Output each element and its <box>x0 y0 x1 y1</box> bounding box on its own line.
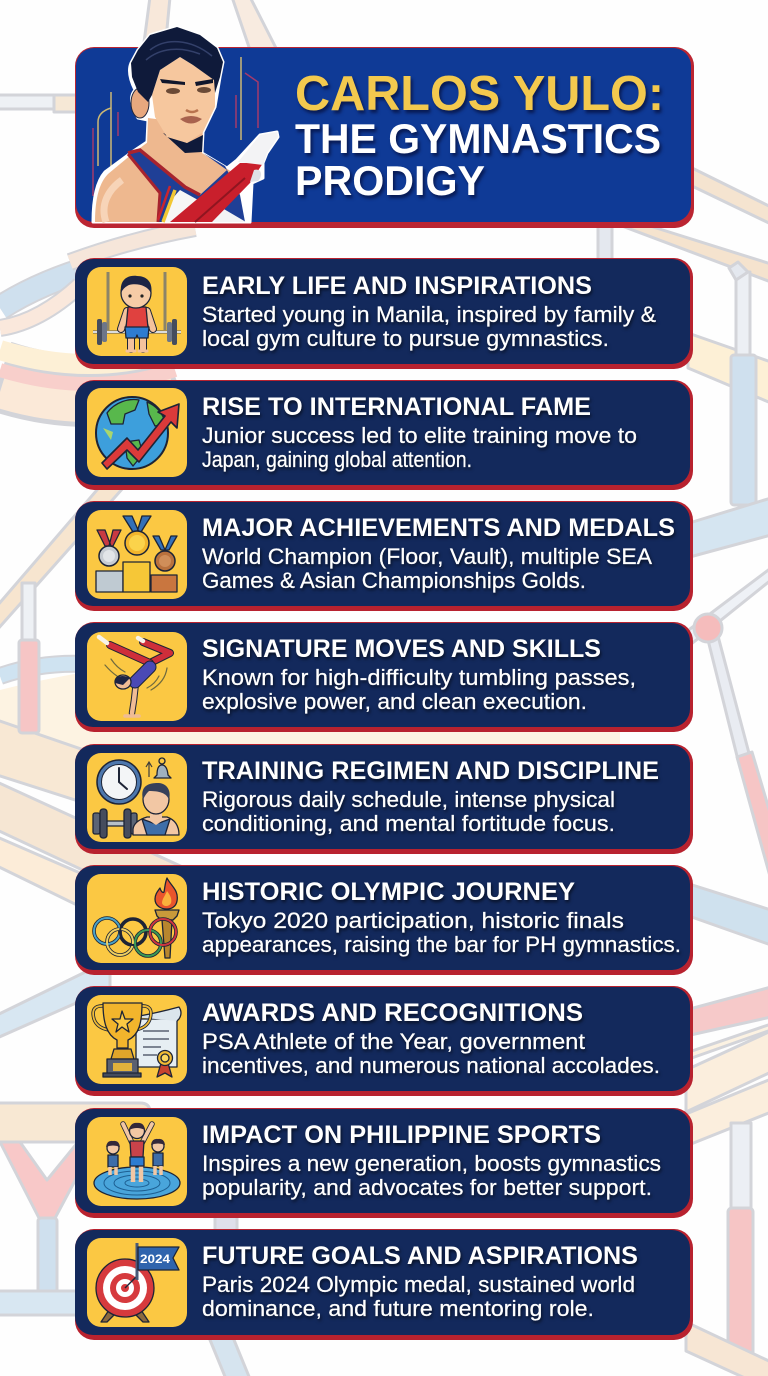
title text <box>295 67 664 204</box>
description: Paris 2024 Olympic medal, sustained world <box>202 1272 635 1297</box>
panel: awards and recognitions <box>75 986 693 1096</box>
description: explosive power, and clean execution. <box>202 689 587 714</box>
description: Started young in Manila, inspired by family & <box>202 302 656 327</box>
description <box>202 787 615 836</box>
description <box>202 1272 635 1321</box>
description: conditioning, and mental fortitude focus. <box>202 811 615 836</box>
description: Games & Asian Championships Golds. <box>202 568 586 593</box>
description: popularity, and advocates for better support. <box>202 1175 652 1200</box>
description: appearances, raising the bar for PH gymnastics. <box>202 932 681 957</box>
description: incentives, and numerous national accolades. <box>202 1053 660 1078</box>
heading: MAJOR ACHIEVEMENTS AND MEDALS <box>202 514 675 542</box>
heading: EARLY LIFE AND INSPIRATIONS <box>202 272 592 300</box>
heading: FUTURE GOALS AND ASPIRATIONS <box>202 1242 638 1270</box>
icon: trophy and certificate <box>87 995 187 1084</box>
panel: future goals and aspirations <box>75 1229 693 1340</box>
heading: RISE TO INTERNATIONAL FAME <box>202 393 591 421</box>
icon: medals on podium <box>87 510 187 599</box>
decorative circuit lines <box>93 57 258 196</box>
panel: signature moves and skills <box>75 622 693 732</box>
description <box>202 908 681 957</box>
heading: HISTORIC OLYMPIC JOURNEY <box>202 878 575 906</box>
description <box>202 302 656 351</box>
panel: historic olympic journey <box>75 865 693 975</box>
description: Japan, gaining global attention. <box>202 447 472 472</box>
icon: clock, dumbbell and athlete <box>87 753 187 842</box>
description: Known for high-difficulty tumbling passes, <box>202 665 636 690</box>
description: Inspires a new generation, boosts gymnastics <box>202 1151 661 1176</box>
icon: target with 2024 flag: 2024 <box>140 1252 170 1266</box>
panel: rise to international fame <box>75 380 693 490</box>
icon: gymnast handstand <box>87 632 187 721</box>
title text: PRODIGY <box>295 157 485 204</box>
title text: THE GYMNASTICS <box>295 115 661 162</box>
description: local gym culture to pursue gymnastics. <box>202 326 609 351</box>
description: World Champion (Floor, Vault), multiple SEA <box>202 544 652 569</box>
panel: title banner <box>75 27 694 228</box>
description: Tokyo 2020 participation, historic finals <box>202 908 624 933</box>
panel: early life and inspirations <box>75 258 693 369</box>
icon: children on rippling water <box>87 1117 187 1206</box>
description <box>202 1029 660 1078</box>
panel: major achievements and medals <box>75 501 693 611</box>
icon: child with barbell <box>87 267 187 356</box>
heading: TRAINING REGIMEN AND DISCIPLINE <box>202 757 659 785</box>
description <box>202 1151 661 1200</box>
description <box>202 665 636 714</box>
illustration: gymnast portrait <box>93 27 278 222</box>
description: dominance, and future mentoring role. <box>202 1296 594 1321</box>
icon: target with 2024 flag <box>87 1238 187 1327</box>
heading: SIGNATURE MOVES AND SKILLS <box>202 635 601 663</box>
heading: IMPACT ON PHILIPPINE SPORTS <box>202 1121 601 1149</box>
icon: olympic rings and torch <box>87 874 187 963</box>
heading: AWARDS AND RECOGNITIONS <box>202 999 583 1027</box>
panel: training regimen and discipline <box>75 744 693 854</box>
description: PSA Athlete of the Year, government <box>202 1029 585 1054</box>
description: Junior success led to elite training move to <box>202 423 637 448</box>
panel: impact on philippine sports <box>75 1108 693 1218</box>
title text: CARLOS YULO: <box>295 67 664 121</box>
description: Rigorous daily schedule, intense physical <box>202 787 615 812</box>
icon: globe with rising arrow <box>87 388 187 477</box>
description <box>202 423 637 472</box>
description <box>202 544 652 593</box>
